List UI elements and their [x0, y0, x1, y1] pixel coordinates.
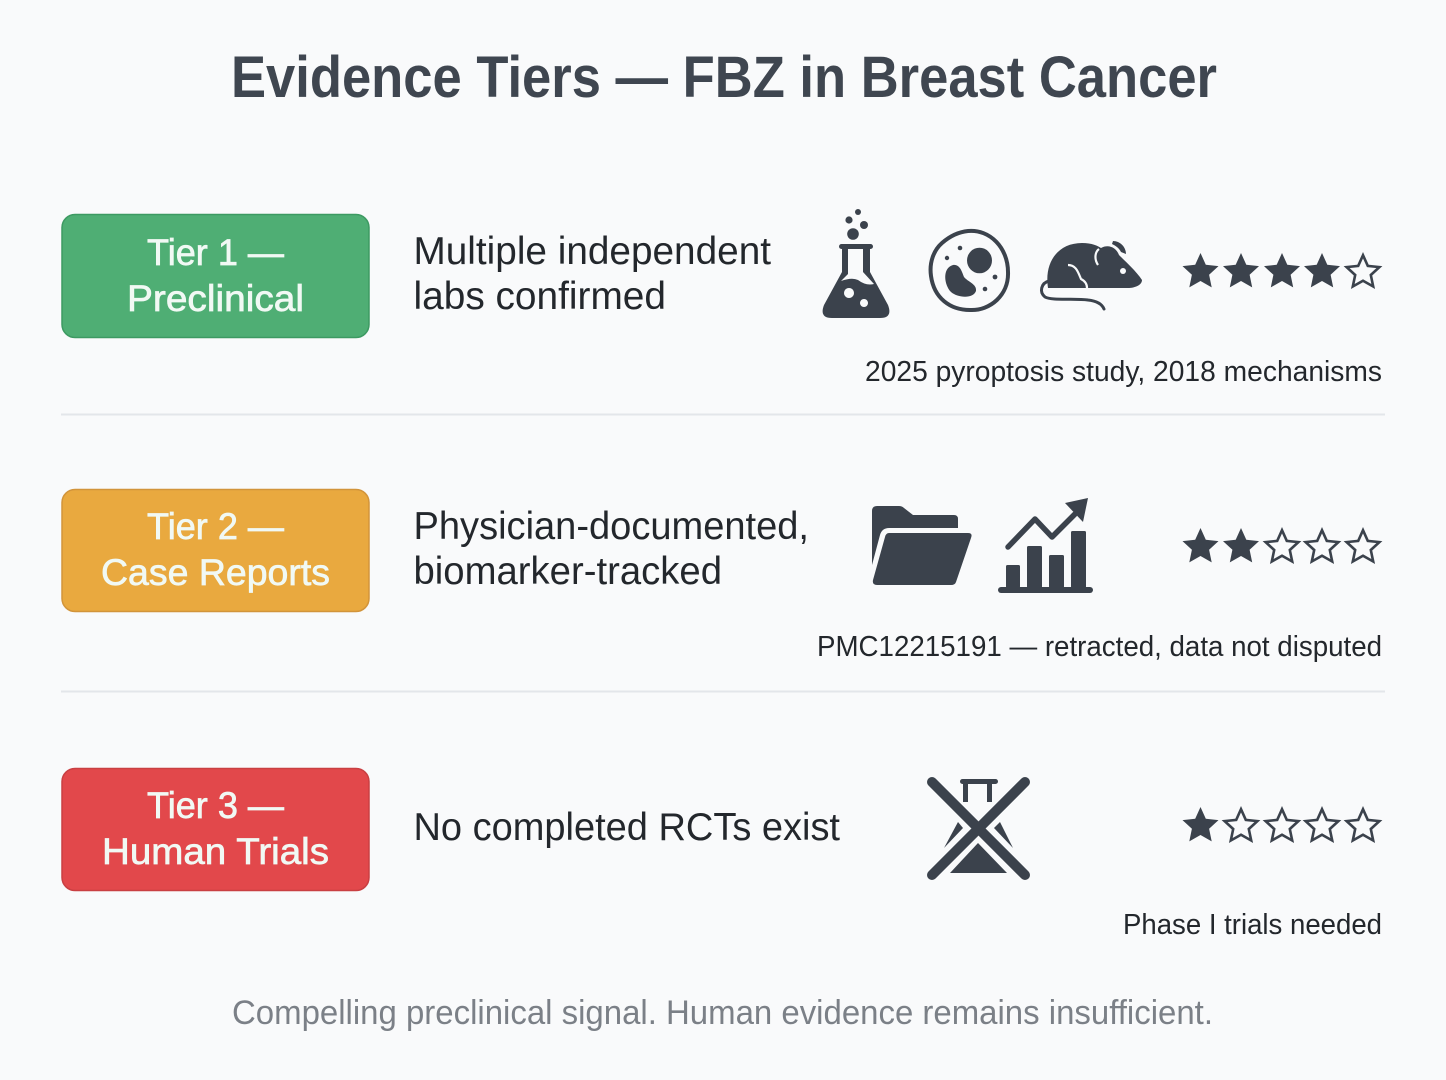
badge: tier 2 case reports: Tier 2 —: [147, 506, 284, 547]
note: tier 1 sources: 2025 pyroptosis study, 2018 mechanisms: [865, 356, 1382, 388]
rating: 2 of 5 stars: [1182, 528, 1379, 562]
note: tier 3 need: Phase I trials needed: [1123, 909, 1382, 941]
badge: tier 1 preclinical: Tier 1 —: [147, 232, 284, 273]
badge: tier 2 case reports: Case Reports: [101, 552, 330, 593]
panel: tier 3 row: [62, 768, 1382, 941]
text: tier 2 description: biomarker-tracked: [414, 550, 722, 593]
badge: tier 3 human trials: Tier 3 —: [147, 785, 284, 826]
icon: crossed-out flask: [932, 779, 1025, 875]
badge: tier 2 case reports: [62, 490, 369, 612]
note: tier 2 source: PMC12215191 — retracted, data not disputed: [817, 631, 1382, 663]
title: Evidence Tiers — FBZ in Breast Cancer: [231, 45, 1217, 110]
rating: 1 of 5 stars: [1182, 807, 1379, 841]
badge: tier 3 human trials: [62, 768, 369, 890]
badge: tier 1 preclinical: Preclinical: [127, 278, 304, 319]
badge: tier 3 human trials: Human Trials: [102, 831, 329, 872]
footer summary: Compelling preclinical signal. Human evidence remains insufficient.: [232, 994, 1213, 1032]
rating: 4 of 5 stars: [1182, 253, 1379, 287]
text: tier 1 description: labs confirmed: [414, 275, 666, 318]
text: tier 2 description: [414, 505, 809, 593]
panel: tier 2 row: [62, 490, 1382, 663]
icon: flask: [823, 209, 889, 318]
text: tier 1 description: Multiple independent: [414, 230, 771, 273]
icon: cell: [931, 231, 1008, 310]
text: tier 3 description: No completed RCTs exist: [414, 806, 840, 849]
icon: growth chart: [998, 498, 1093, 593]
icon: folder: [872, 506, 972, 585]
text: tier 2 description: Physician-documented,: [414, 505, 809, 548]
text: tier 1 description: [414, 230, 771, 318]
badge: tier 1 preclinical: [62, 214, 369, 338]
icon: mouse: [1042, 241, 1142, 309]
panel: tier 1 row: [62, 209, 1382, 388]
